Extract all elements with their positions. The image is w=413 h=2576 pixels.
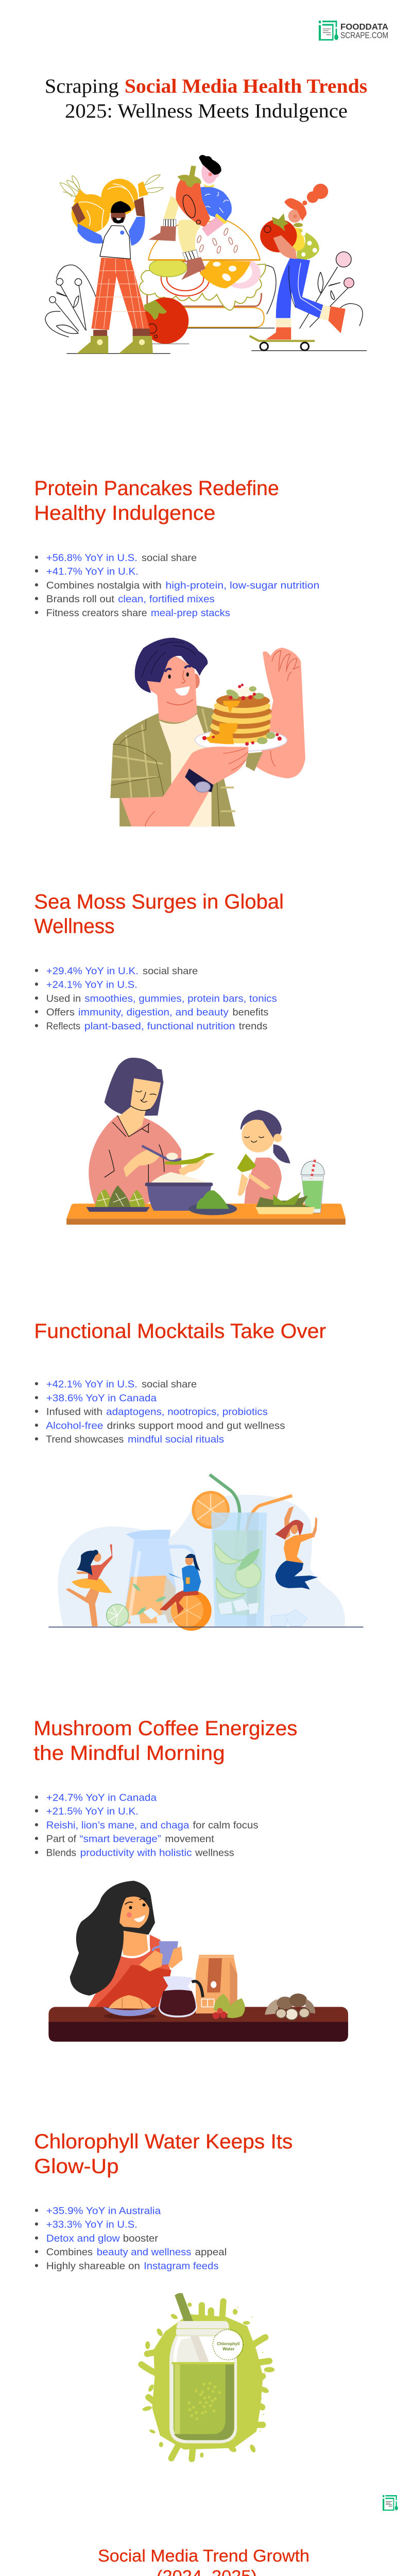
chart title: Social Media Trend Growth	[98, 2546, 309, 2565]
ground line	[48, 1626, 364, 1628]
title	[45, 75, 367, 122]
bullet list: social share	[142, 552, 197, 564]
bullet list: Trend showcases	[46, 1434, 124, 1445]
centre boy on burger	[148, 155, 232, 280]
bullet list: smoothies, gummies, protein bars, tonics	[84, 993, 277, 1004]
front arm and hand	[121, 747, 248, 826]
coffee bag	[196, 1955, 237, 2013]
orange slice with seated woman	[160, 1554, 212, 1631]
table	[66, 1204, 346, 1225]
label badge	[213, 2329, 243, 2360]
section: protein pancakes	[34, 477, 319, 826]
raised arm with thumb up	[256, 648, 305, 778]
bullet list	[35, 965, 277, 1032]
bullet list: Detox and glow	[46, 2233, 121, 2244]
tray with rice dumplings	[86, 1185, 150, 1212]
heading	[34, 2130, 292, 2178]
jar lid	[176, 2321, 230, 2335]
bullet list: +41.7% YoY in U.K.	[46, 566, 139, 577]
pancake stack	[202, 681, 282, 745]
mushrooms	[265, 1993, 315, 2020]
jumping woman	[275, 1506, 318, 1589]
right woman on skateboard	[250, 184, 367, 351]
bullet list: Combines	[46, 2247, 93, 2258]
bullet list: productivity with holistic	[80, 1848, 192, 1859]
bullet list: for calm focus	[193, 1820, 259, 1831]
bullet list: wellness	[195, 1848, 234, 1859]
mother	[89, 1058, 215, 1204]
logo wordmark: SCRAPE.COM	[340, 31, 388, 40]
hero illustration	[45, 155, 367, 353]
bullet list: Part of	[46, 1834, 77, 1845]
bullet list: +24.1% YoY in U.S.	[46, 979, 137, 990]
bullet list: clean, fortified mixes	[118, 594, 215, 605]
bullet list: adaptogens, nootropics, probiotics	[106, 1406, 268, 1417]
plate of sea moss	[188, 1190, 237, 1215]
bullet list: +24.7% YoY in Canada	[46, 1792, 157, 1803]
section: chart	[35, 2546, 394, 2576]
bullet list: Offers	[46, 1007, 75, 1018]
bullet list: social share	[143, 965, 198, 977]
heading: the Mindful Morning	[33, 1742, 225, 1765]
left man with onions	[60, 175, 170, 353]
burger	[140, 221, 274, 328]
bullet list: booster	[123, 2233, 159, 2244]
bullet list: +42.1% YoY in U.S.	[46, 1379, 137, 1390]
bullet list: +38.6% YoY in Canada	[46, 1393, 157, 1404]
heading: Protein Pancakes Redefine	[34, 477, 279, 500]
bullet list: plant-based, functional nutrition	[84, 1021, 235, 1032]
bullet list: +56.8% YoY in U.S.	[46, 552, 137, 564]
header logo	[319, 21, 388, 41]
bullet list: movement	[165, 1834, 214, 1845]
heading: Sea Moss Surges in Global	[34, 890, 284, 913]
bullet list: +35.9% YoY in Australia	[46, 2205, 161, 2216]
bullet list: Fitness creators share	[46, 607, 147, 619]
cup of green drink	[301, 1158, 324, 1213]
straw top	[175, 2293, 193, 2321]
bullet list	[35, 1792, 259, 1859]
bullet list: trends	[239, 1021, 267, 1032]
section: chlorophyll water	[34, 2130, 292, 2459]
left outline plant	[45, 265, 96, 337]
heading: Mushroom Coffee Energizes	[33, 1717, 298, 1740]
dancing girl	[66, 1544, 112, 1626]
bullet list	[35, 552, 319, 619]
bullet list: Alcohol-free	[46, 1420, 104, 1431]
section: mushroom coffee	[33, 1717, 348, 2042]
plaid shirt	[110, 705, 263, 826]
child	[237, 1110, 290, 1204]
bullet list: +21.5% YoY in U.K.	[46, 1806, 139, 1817]
bullet list: immunity, digestion, and beauty	[78, 1007, 229, 1018]
leaves and berries	[213, 1994, 245, 2019]
bullet list: Reflects	[46, 1021, 80, 1032]
bullet list: Brands roll out	[46, 594, 115, 605]
chart title	[98, 2546, 309, 2576]
heading: Chlorophyll Water Keeps Its	[34, 2130, 292, 2153]
illustration: chlorophyll water jar	[141, 2293, 274, 2459]
icon: logo mark	[319, 21, 338, 41]
glass with limes	[192, 1475, 292, 1626]
t-shirt	[159, 714, 212, 826]
label badge: Chlorophyll	[217, 2342, 239, 2346]
hero section	[45, 75, 367, 353]
heading: Functional Mocktails Take Over	[34, 1320, 326, 1343]
title: Social Media Health Trends	[125, 75, 367, 97]
ice cubes	[271, 1609, 307, 1626]
title: 2025: Wellness Meets Indulgence	[65, 100, 348, 122]
heading	[33, 1717, 298, 1765]
small logo icon	[383, 2495, 398, 2511]
bullet list: beauty and wellness	[97, 2247, 191, 2258]
title: Scraping	[45, 75, 119, 97]
plate with croissant	[103, 1995, 157, 2019]
bullet list: +29.4% YoY in U.K.	[46, 965, 139, 977]
illustration: mother and child cooking	[66, 1058, 346, 1225]
bullet list: Highly shareable on	[46, 2261, 140, 2272]
jar body	[169, 2329, 237, 2443]
bowl with rice	[145, 1172, 213, 1211]
illustration: mocktails and people	[48, 1475, 364, 1631]
bubbles	[187, 2382, 221, 2420]
plate	[195, 729, 287, 751]
bullet list: Reishi, lion’s mane, and chaga	[46, 1820, 190, 1831]
label badge: Water	[222, 2347, 235, 2351]
background blob	[58, 1495, 345, 1626]
heading: Wellness	[34, 915, 114, 938]
lime wedge	[107, 1604, 128, 1626]
heading: Healthy Indulgence	[34, 502, 215, 524]
illustration: man with pancakes	[110, 638, 305, 826]
woman	[70, 1881, 183, 2007]
bullet list: Instagram feeds	[144, 2261, 218, 2272]
bullet list: meal-prep stacks	[151, 607, 230, 619]
green splash	[141, 2301, 274, 2459]
tomato foreground	[143, 298, 189, 344]
bullet list: Infused with	[46, 1406, 102, 1417]
bullet list: high-protein, low-sugar nutrition	[165, 580, 319, 591]
bullet list: mindful social rituals	[128, 1434, 224, 1445]
bullet list: appeal	[195, 2247, 227, 2258]
section: sea moss	[34, 890, 346, 1225]
pitcher of juice	[124, 1530, 195, 1624]
illustration: woman with coffee	[48, 1881, 348, 2042]
logo wordmark	[340, 23, 388, 40]
bullet list: social share	[142, 1379, 197, 1390]
bullet list: Combines nostalgia with	[46, 580, 162, 591]
heading	[34, 477, 279, 524]
logo wordmark: FOODDATA	[340, 23, 388, 32]
heading	[34, 890, 284, 938]
coffee pot	[159, 1976, 203, 2018]
bullet list: +33.3% YoY in U.S.	[46, 2219, 137, 2230]
neck and face	[135, 638, 208, 722]
bullet list: Used in	[46, 993, 81, 1004]
right outline plant	[260, 252, 363, 329]
bullet list: benefits	[233, 1007, 268, 1018]
bullet list: drinks support mood and gut wellness	[107, 1420, 285, 1431]
heading: Glow-Up	[34, 2155, 119, 2178]
bullet list	[35, 2205, 227, 2272]
bullet list	[35, 1379, 285, 1445]
bullet list: “smart beverage”	[80, 1834, 161, 1845]
bullet list: Blends	[46, 1848, 76, 1859]
table	[48, 2007, 348, 2042]
banana leaves on tray	[255, 1192, 315, 1214]
wrist watch	[185, 769, 213, 792]
section: functional mocktails	[34, 1320, 364, 1631]
